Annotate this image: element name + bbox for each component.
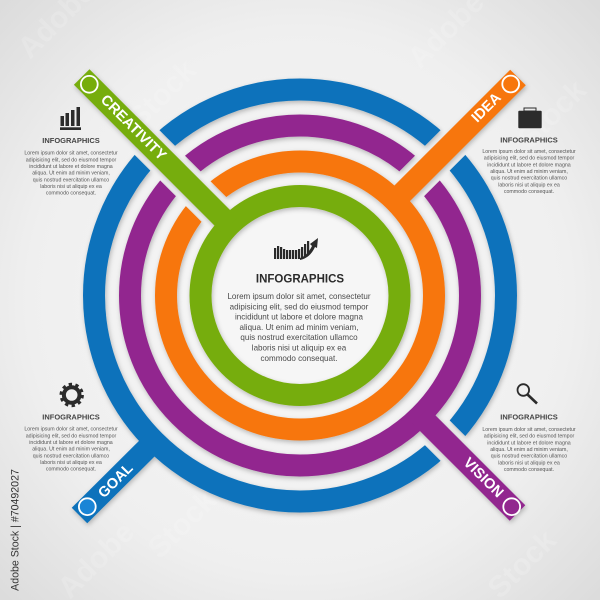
stock id label: Adobe Stock | #70492027 bbox=[10, 469, 22, 591]
text block: top right: commodo consequat. bbox=[504, 189, 554, 195]
center text: laboris nisi ut aliquip ex ea bbox=[252, 344, 347, 352]
ring and ribbon: blue goal bbox=[79, 90, 506, 516]
ring and ribbon: purple vision bbox=[130, 126, 520, 515]
text block: bottom left: Lorem ipsum dolor sit amet, consectetur bbox=[24, 427, 118, 433]
icon: briefcase bbox=[518, 108, 542, 128]
ring and ribbon: purple vision: VISION bbox=[460, 455, 506, 501]
text block: top right: incididunt ut labore et dolore magna bbox=[487, 162, 571, 168]
text block: bottom right: incididunt ut labore et dolore magna bbox=[487, 440, 571, 446]
center text: aliqua. Ut enim ad minim veniam, bbox=[240, 323, 358, 332]
text block: bottom left: commodo consequat. bbox=[46, 467, 96, 473]
text block: bottom right: laboris nisi ut aliquip ex ea bbox=[498, 460, 560, 466]
text block: top right bbox=[482, 136, 576, 195]
center heading: INFOGRAPHICS bbox=[256, 274, 344, 286]
center text: adipisicing elit, sed do eiusmod tempor bbox=[230, 302, 369, 311]
text block: top right: INFOGRAPHICS bbox=[500, 136, 558, 144]
center text: commodo consequat. bbox=[261, 354, 337, 363]
text block: top left: commodo consequat. bbox=[46, 191, 96, 197]
text block: top right: adipisicing elit, sed do eiusmod tempor bbox=[484, 156, 574, 162]
center text: quis nostrud exercitation ullamco bbox=[240, 333, 358, 342]
text block: bottom left: laboris nisi ut aliquip ex ea bbox=[40, 460, 102, 466]
text block: top left: INFOGRAPHICS bbox=[42, 136, 100, 145]
text block: bottom right: quis nostrud exercitation ullamco bbox=[491, 454, 567, 460]
ring and ribbon: orange idea: IDEA bbox=[469, 90, 505, 126]
icon: magnifier bbox=[518, 384, 537, 404]
text block: bottom right bbox=[482, 412, 576, 473]
text block: bottom left: quis nostrud exercitation ullamco bbox=[33, 453, 109, 459]
text block: top left: quis nostrud exercitation ullamco bbox=[33, 177, 109, 183]
text block: bottom right: Lorem ipsum dolor sit amet, consectetur bbox=[482, 427, 576, 433]
text block: top right: quis nostrud exercitation ullamco bbox=[491, 176, 567, 182]
text block: top left: incididunt ut labore et dolore magna bbox=[29, 164, 113, 170]
text block: bottom right: adipisicing elit, sed do eiusmod tempor bbox=[484, 434, 574, 440]
text block: bottom left: adipisicing elit, sed do eiusmod tempor bbox=[26, 433, 116, 439]
center disc bbox=[210, 206, 390, 386]
text block: top right: Lorem ipsum dolor sit amet, consectetur bbox=[482, 149, 576, 155]
text block: bottom right: INFOGRAPHICS bbox=[500, 412, 558, 422]
text block: top left: aliqua. Ut enim ad minim veniam, bbox=[32, 171, 110, 177]
ring and ribbon: green creativity: CREATIVITY bbox=[97, 92, 169, 164]
text block: top left bbox=[24, 136, 118, 197]
center text: Lorem ipsum dolor sit amet, consectetur bbox=[227, 292, 371, 301]
text block: top left: adipisicing elit, sed do eiusmod tempor bbox=[26, 157, 116, 163]
ring and ribbon: green creativity bbox=[81, 76, 400, 395]
text block: bottom left: incididunt ut labore et dolore magna bbox=[29, 440, 113, 446]
center text: incididunt ut labore et dolore magna bbox=[235, 313, 363, 322]
center text bbox=[227, 292, 371, 363]
watermark: Stock bbox=[512, 74, 593, 155]
ring and ribbon: orange idea bbox=[166, 76, 519, 429]
watermark: Stock bbox=[142, 484, 223, 565]
watermark: Stock bbox=[122, 54, 203, 135]
text block: bottom left bbox=[24, 412, 118, 473]
text block: bottom left: aliqua. Ut enim ad minim veniam, bbox=[32, 447, 110, 453]
text block: top left: laboris nisi ut aliquip ex ea bbox=[40, 184, 102, 190]
icon: bars bbox=[60, 107, 81, 130]
text block: bottom right: commodo consequat. bbox=[504, 467, 554, 473]
text block: top right: aliqua. Ut enim ad minim veniam, bbox=[490, 169, 568, 175]
ring and ribbon: blue goal: GOAL bbox=[95, 460, 137, 502]
text block: bottom right: aliqua. Ut enim ad minim veniam, bbox=[490, 447, 568, 453]
text block: top left: Lorem ipsum dolor sit amet, consectetur bbox=[24, 151, 118, 157]
icon: gear bbox=[61, 384, 82, 406]
icon: rising bar chart with arrow bbox=[274, 238, 318, 260]
text block: top right: laboris nisi ut aliquip ex ea bbox=[498, 182, 560, 188]
text block: bottom left: INFOGRAPHICS bbox=[42, 412, 100, 422]
